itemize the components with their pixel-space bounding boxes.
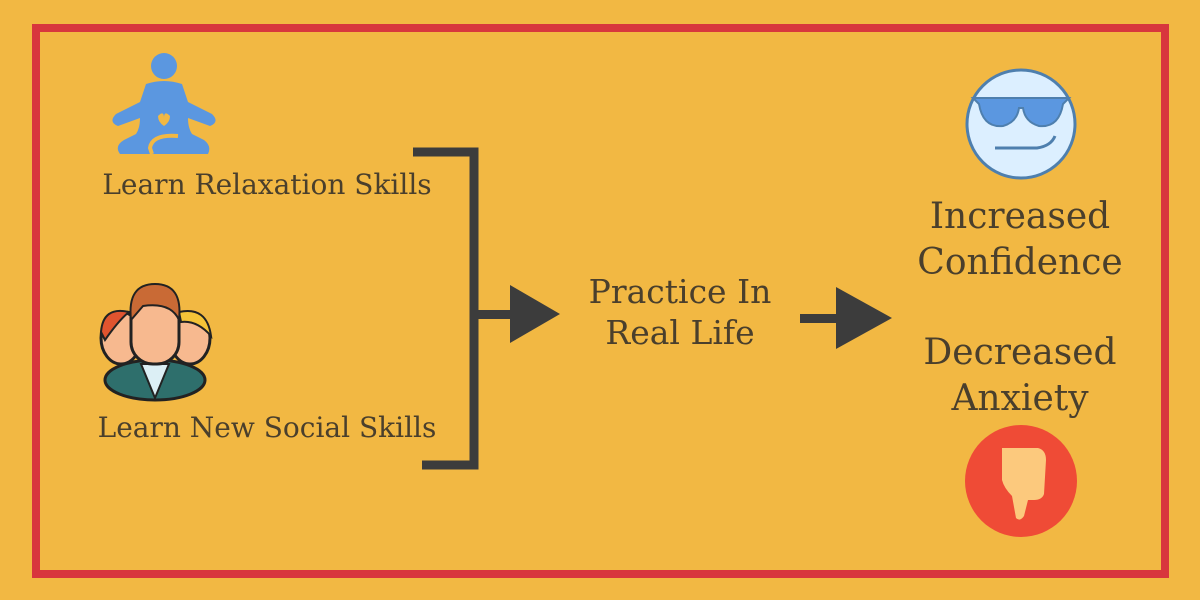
text: practice: Real Life xyxy=(605,313,755,352)
text: confidence xyxy=(917,196,1123,283)
text: practice xyxy=(589,272,771,352)
arrow 1 xyxy=(478,285,560,343)
arrow 2 xyxy=(800,287,892,349)
text: anxiety: Decreased xyxy=(923,332,1117,373)
text: confidence: Increased xyxy=(930,196,1110,237)
text: relaxation: Learn Relaxation Skills xyxy=(102,168,432,201)
bracket xyxy=(413,148,478,470)
icon: sunglasses face xyxy=(966,68,1076,180)
text: anxiety: Anxiety xyxy=(951,378,1089,419)
text: anxiety xyxy=(923,332,1117,419)
text: confidence: Confidence xyxy=(917,242,1123,283)
text: practice: Practice In xyxy=(589,272,771,311)
icon: group of people xyxy=(100,283,212,402)
icon: meditation xyxy=(112,53,216,154)
icon: thumbs down xyxy=(965,425,1077,537)
text: social: Learn New Social Skills xyxy=(98,411,436,444)
